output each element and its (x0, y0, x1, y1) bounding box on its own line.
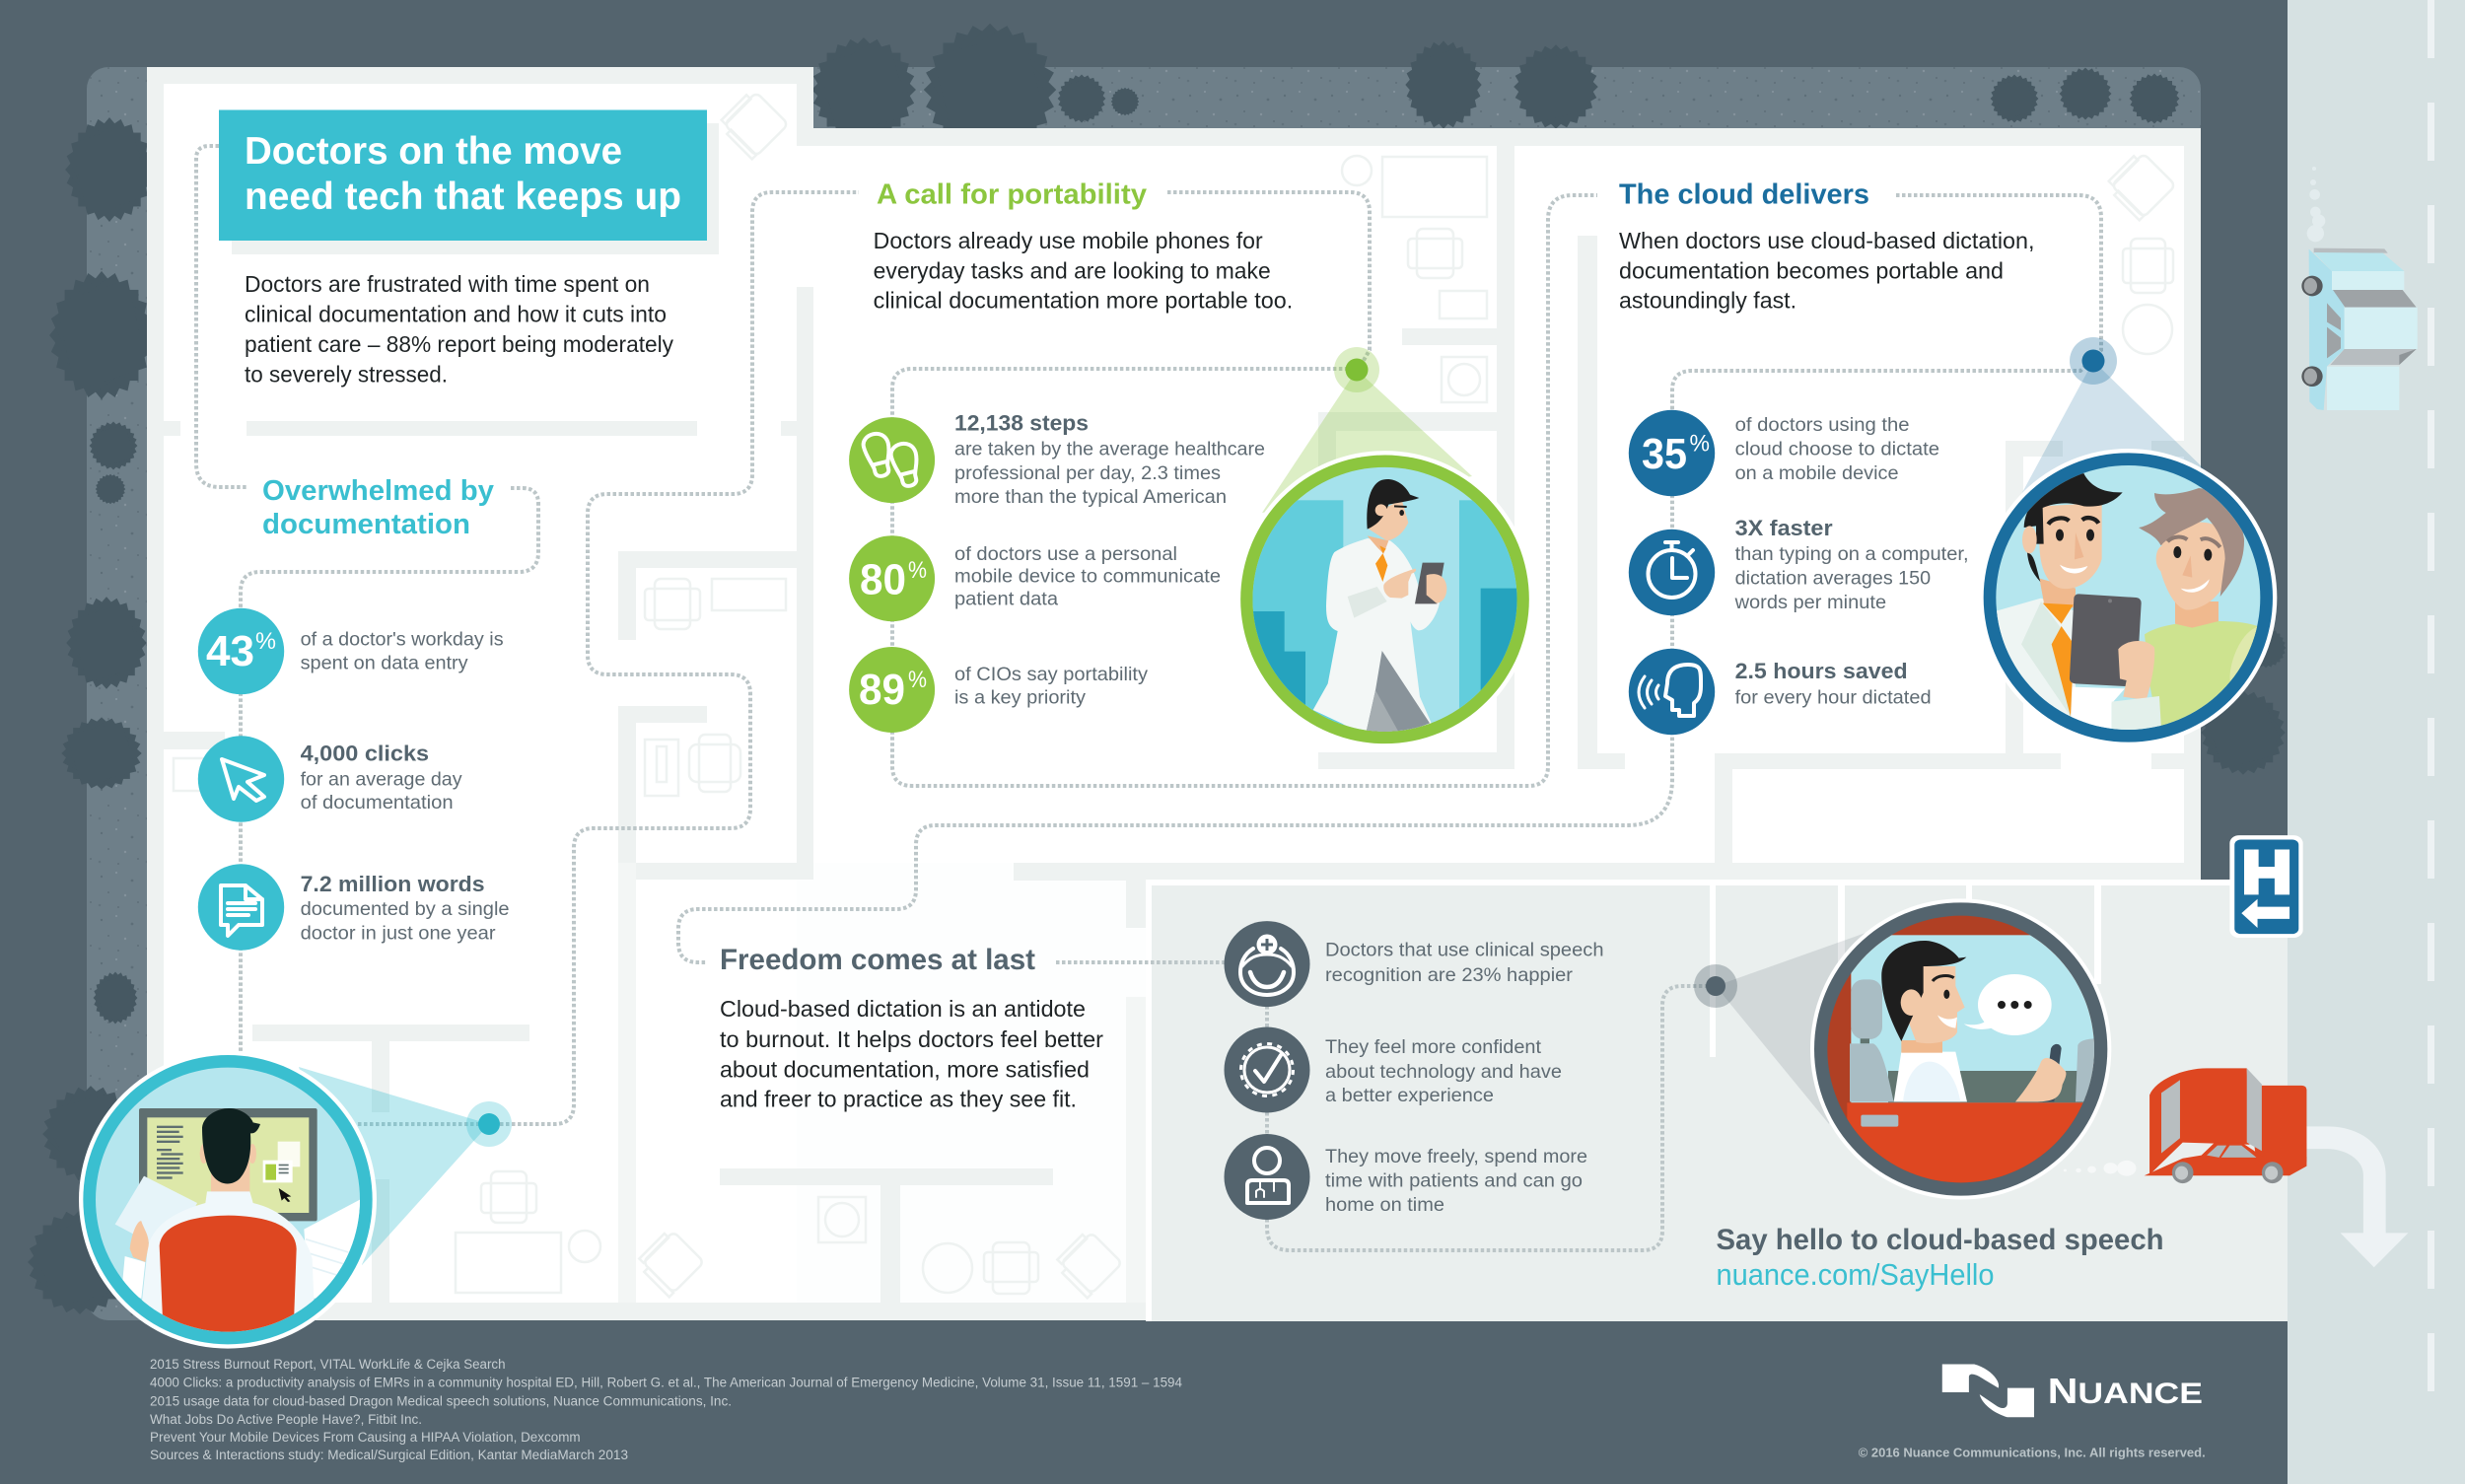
sources list: Sources & Interactions study: Medical/Surgical Edition, Kantar MediaMarch 2013 (150, 1448, 628, 1462)
sources list: 4000 Clicks: a productivity analysis of EMRs in a community hospital ED, Hill, Robert G. et al., The American Journal of Emergency Medicine, Volume 31, Issue 11, 1591 – 1594 (150, 1376, 1182, 1390)
stat: 35 percent: of doctors using the (1735, 414, 1910, 436)
stat: 89 percent: of CIOs say portability (954, 664, 1148, 685)
freedom text: Cloud-based dictation is an antidote (720, 996, 1086, 1022)
stat: 2.5 hours saved: 2.5 hours saved (1735, 659, 1908, 683)
stat: 12,138 steps: 12,138 steps (954, 411, 1089, 436)
benefit: happier: recognition are 23% happier (1325, 964, 1573, 986)
portability text (874, 228, 1293, 314)
intro text: clinical documentation and how it cuts into (245, 302, 667, 327)
freedom text: about documentation, more satisfied (720, 1056, 1090, 1082)
stat: 3X faster (1629, 516, 1969, 615)
benefit: move freely: They move freely, spend more (1325, 1146, 1587, 1167)
callout: say hello: nuance.com/SayHello (1716, 1257, 1994, 1292)
stat: 35 percent: cloud choose to dictate (1735, 438, 1939, 459)
benefit: happier (1225, 921, 1603, 1007)
panel: say hello parking area (1152, 885, 2288, 1321)
sources list: 2015 usage data for cloud-based Dragon Medical speech solutions, Nuance Communications, Inc. (150, 1394, 732, 1408)
benefit: confident: They feel more confident (1325, 1036, 1541, 1058)
stat: 89 percent: is a key priority (954, 687, 1086, 709)
sources list: Prevent Your Mobile Devices From Causing a HIPAA Violation, Dexcomm (150, 1430, 581, 1445)
stat: 89 percent: % (908, 667, 927, 693)
illustration: doctor with phone (1236, 451, 1533, 747)
cloud text: When doctors use cloud-based dictation, (1619, 228, 2035, 253)
spotlight cone: driver (1694, 932, 1868, 1124)
stat: 43 percent (198, 608, 504, 694)
heading: overwhelmed by documentation (262, 475, 494, 540)
benefit: confident: a better experience (1325, 1085, 1494, 1106)
yard with speckle (87, 67, 2201, 1320)
freedom text: and freer to practice as they see fit. (720, 1087, 1077, 1112)
stat: 3X faster: words per minute (1734, 592, 1886, 613)
benefit: move freely: home on time (1325, 1194, 1444, 1216)
stat: 12,138 steps: are taken by the average healthcare (954, 438, 1265, 459)
dotted route path (196, 146, 2101, 1250)
trees (28, 24, 2286, 1314)
intro text: patient care – 88% report being moderately (245, 331, 674, 357)
stat: 12,138 steps: more than the typical American (954, 486, 1227, 508)
stat: 7.2 million words: documented by a single (301, 898, 510, 920)
benefit: move freely (1225, 1134, 1587, 1220)
illustration: doctor at computer (79, 1051, 377, 1349)
portability text: everyday tasks and are looking to make (874, 258, 1271, 284)
stat: 35 percent: % (1690, 431, 1710, 458)
illustration: driver in car (1810, 898, 2111, 1200)
road (2288, 0, 2465, 1484)
heading: overwhelmed by documentation: documentation (262, 509, 470, 540)
sources list: 2015 Stress Burnout Report, VITAL WorkLife & Cejka Search (150, 1357, 505, 1372)
stat: 80 percent (849, 535, 1221, 621)
callout: say hello (1716, 1224, 2163, 1292)
stat: 80 percent: % (908, 557, 927, 584)
benefit: happier: Doctors that use clinical speech (1325, 939, 1603, 960)
sources list (150, 1357, 1182, 1462)
stat: 3X faster: 3X faster (1735, 516, 1833, 540)
copyright: © 2016 Nuance Communications, Inc. All rights reserved. (1859, 1446, 2206, 1459)
stat: 4,000 clicks: 4,000 clicks (301, 742, 429, 766)
portability text: Doctors already use mobile phones for (874, 228, 1263, 253)
cloud text: astoundingly fast. (1619, 288, 1796, 314)
heading: the cloud delivers: The cloud delivers (1619, 179, 1869, 211)
callout: say hello: Say hello to cloud-based speech (1716, 1224, 2163, 1256)
portability text: clinical documentation more portable too. (874, 288, 1293, 314)
stat: 89 percent: 89 (859, 666, 905, 714)
stat: 43 percent: spent on data entry (301, 653, 468, 674)
stat: 4,000 clicks: for an average day (301, 769, 462, 791)
illustration: doctor and patient with tablet (1979, 449, 2277, 746)
furniture outlines (174, 89, 2176, 1298)
title banner: need tech that keeps up (245, 176, 681, 218)
stat: 89 percent (849, 647, 1148, 733)
benefit: confident (1225, 1027, 1562, 1112)
spotlight cone: cloud (2011, 337, 2209, 513)
stat: 7.2 million words: doctor in just one year (301, 923, 496, 945)
sources list: What Jobs Do Active People Have?, Fitbit Inc. (150, 1412, 422, 1427)
heading: a call for portability: A call for portability (877, 179, 1147, 211)
stat: 80 percent: of doctors use a personal (954, 543, 1177, 565)
intro text: to severely stressed. (245, 361, 448, 387)
logo: Nuance (1942, 1365, 2203, 1417)
stat: 12,138 steps: professional per day, 2.3 times (954, 462, 1221, 484)
stat: 43 percent: 43 (206, 627, 254, 675)
stat: 43 percent: % (255, 628, 276, 655)
stat: 3X faster: than typing on a computer, (1735, 543, 1969, 565)
stat: 7.2 million words: 7.2 million words (301, 872, 485, 896)
stat: 80 percent: 80 (860, 556, 906, 604)
stat: 7.2 million words (198, 864, 510, 951)
floor plan (147, 67, 2288, 1321)
stat: 3X faster: dictation averages 150 (1735, 568, 1931, 590)
stat: 35 percent: on a mobile device (1735, 462, 1899, 484)
stat: 43 percent: of a doctor's workday is (301, 629, 504, 651)
stat: 4,000 clicks (198, 736, 462, 822)
stat: 35 percent: 35 (1642, 430, 1687, 478)
benefit: move freely: time with patients and can go (1325, 1170, 1583, 1192)
spotlight cone: desk (299, 1067, 512, 1265)
benefit: confident: about technology and have (1325, 1061, 1562, 1083)
stat: 12,138 steps (849, 411, 1265, 508)
arrow: road turn (2306, 1126, 2408, 1267)
car on road with exhaust (2301, 167, 2418, 410)
heading: overwhelmed by documentation: Overwhelmed by (262, 475, 494, 507)
freedom text (720, 996, 1103, 1112)
spotlight cone: portability (1262, 347, 1472, 513)
stat: 2.5 hours saved (1629, 649, 1932, 735)
hospital sign (2229, 835, 2303, 938)
stat: 80 percent: patient data (954, 589, 1058, 610)
heading: freedom comes at last: Freedom comes at last (720, 944, 1035, 976)
stat: 80 percent: mobile device to communicate (954, 566, 1221, 588)
title banner (219, 110, 719, 254)
intro text: Doctors are frustrated with time spent on (245, 271, 650, 297)
red truck (2064, 1068, 2306, 1183)
title banner: Doctors on the move (245, 130, 622, 173)
stat: 2.5 hours saved: for every hour dictated (1735, 687, 1932, 709)
stat: 35 percent (1629, 410, 1939, 496)
logo: Nuance: NUANCE (2048, 1371, 2203, 1411)
cloud text (1619, 228, 2035, 314)
intro text (245, 271, 674, 387)
cloud text: documentation becomes portable and (1619, 258, 2004, 284)
stat: 4,000 clicks: of documentation (301, 792, 454, 813)
freedom text: to burnout. It helps doctors feel better (720, 1026, 1103, 1052)
